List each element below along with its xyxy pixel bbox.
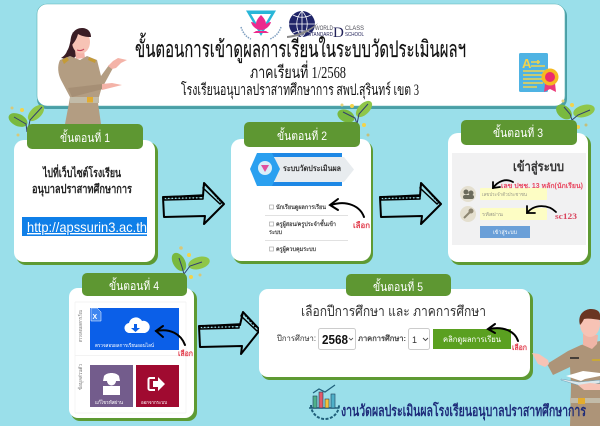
tab: step 5 heading: ขั้นตอนที่ 5 [373,278,423,294]
panel: step 2 [231,122,373,264]
side label: results: ตรวจสอบผลการเรียน [77,310,84,342]
note: password: sc123 [555,211,577,221]
tile: check results online: ตรวจสอบผลการเรียนออนไลน์ [95,342,155,349]
tile: log out: ออกจากระบบ [141,400,167,406]
panel: step 4 [69,273,197,421]
form: login: รหัสผ่าน [482,212,504,218]
icon: chart and gear [309,385,339,419]
label: term: ภาคการศึกษา: [358,334,406,343]
menu: user types [265,203,348,254]
button: view results: คลิกดูผลการเรียน [443,335,502,345]
form: login: เข้าสู่ระบบ [493,229,517,236]
tab: step 5 heading [346,274,451,296]
side label: personal: ข้อมูลส่วนตัว [77,364,84,390]
text: go to school website: อนุบาลปราสาทศึกษาการ [32,182,132,197]
select: term: 1 [412,335,417,345]
panel: step 1 [14,124,158,265]
select: year: 2568 [322,332,348,347]
title [135,33,466,100]
illustration: woman teacher [58,28,127,124]
tab: step 4 heading [82,273,187,296]
arrow: step 2 to step 3 [380,183,441,224]
arrow: step 1 to step 2 [163,183,224,224]
title: โรงเรียนอนุบาลปราสาทศึกษาการ สพป.สุรินทร์ เขต 3 [181,81,419,100]
illustration: man teacher [532,309,600,426]
tile: change password [90,365,133,407]
arrows: login hints [493,180,556,213]
tab: step 3 heading: ขั้นตอนที่ 3 [493,124,543,140]
icon: school logo [241,10,281,39]
badge: evaluation system [250,153,354,186]
menu: user types: นักเรียนดูผลการเรียน [276,203,327,212]
panel: step 3 [448,120,591,265]
tab: step 2 heading: ขั้นตอนที่ 2 [277,127,327,143]
icon: world class standard school logo [287,11,365,41]
link: school url: http://apssurin3.ac.th [27,219,147,235]
text: go to school website [32,164,132,197]
icon: certificate [519,53,558,92]
menu: user types: ครูผู้ควบคุมระบบ [276,245,316,254]
leaves: step 4 [169,246,211,279]
header panel [37,4,567,109]
tile: check results online: X [92,314,98,321]
leaves: step 1 [6,102,47,136]
tab: step 4 heading: ขั้นตอนที่ 4 [109,277,159,293]
leaves: step 2 [335,98,375,136]
button: view results [433,329,511,349]
tab: step 2 heading [244,122,360,147]
select: term [408,328,430,350]
icon: certificate: A [522,56,532,71]
text: go to school website: ไปที่เว็บไซต์โรงเรียน [42,164,122,180]
label: academic year: ปีการศึกษา: [276,334,316,343]
icon: world class standard school logo: SCHOOL [345,32,364,38]
label: select: เลือก [353,220,370,230]
label: select: เลือก [512,343,527,352]
panel: step 5 [259,274,533,380]
menu: user types: ครูผู้สอน/ครูประจำชั้นเข้า [276,218,336,229]
arrow: select student [330,199,364,217]
heading: select year and term: เลือกปีการศึกษา และ ภาคการศึกษา [301,303,486,319]
arrow: select download [156,326,185,345]
form: login [452,153,586,245]
icon: world class standard school logo: D [333,25,344,41]
arrow: step 4 to step 5 [199,312,260,354]
tab: step 1 heading: ขั้นตอนที่ 1 [60,129,110,145]
tile: log out [136,365,179,407]
form: login: เลขประจำตัวประชาชน [482,192,528,198]
note: citizen id: เลข ปชช. 13 หลัก(นักเรียน) [501,182,583,190]
leaves: step 3 [553,100,596,129]
select: year [318,328,356,350]
icon: world class standard school logo: CLASS [345,25,365,32]
badge: evaluation system: ระบบวัดประเมินผล [283,164,341,173]
tab: step 3 heading [461,120,577,145]
menu: user types: ระบบ [269,229,282,236]
label: select: เลือก [178,349,193,358]
title: ภาคเรียนที่ 1/2568 [250,60,346,82]
tab: step 1 heading [27,124,143,149]
icon: world class standard school logo: STANDARD [308,32,333,38]
arrow: select button [488,324,518,341]
tile: check results online [90,308,179,350]
tile: change password: แก้ไขรหัสผ่าน [95,399,124,406]
form: login: เข้าสู่ระบบ [513,159,564,175]
icon: world class standard school logo: WORLD [315,25,333,32]
